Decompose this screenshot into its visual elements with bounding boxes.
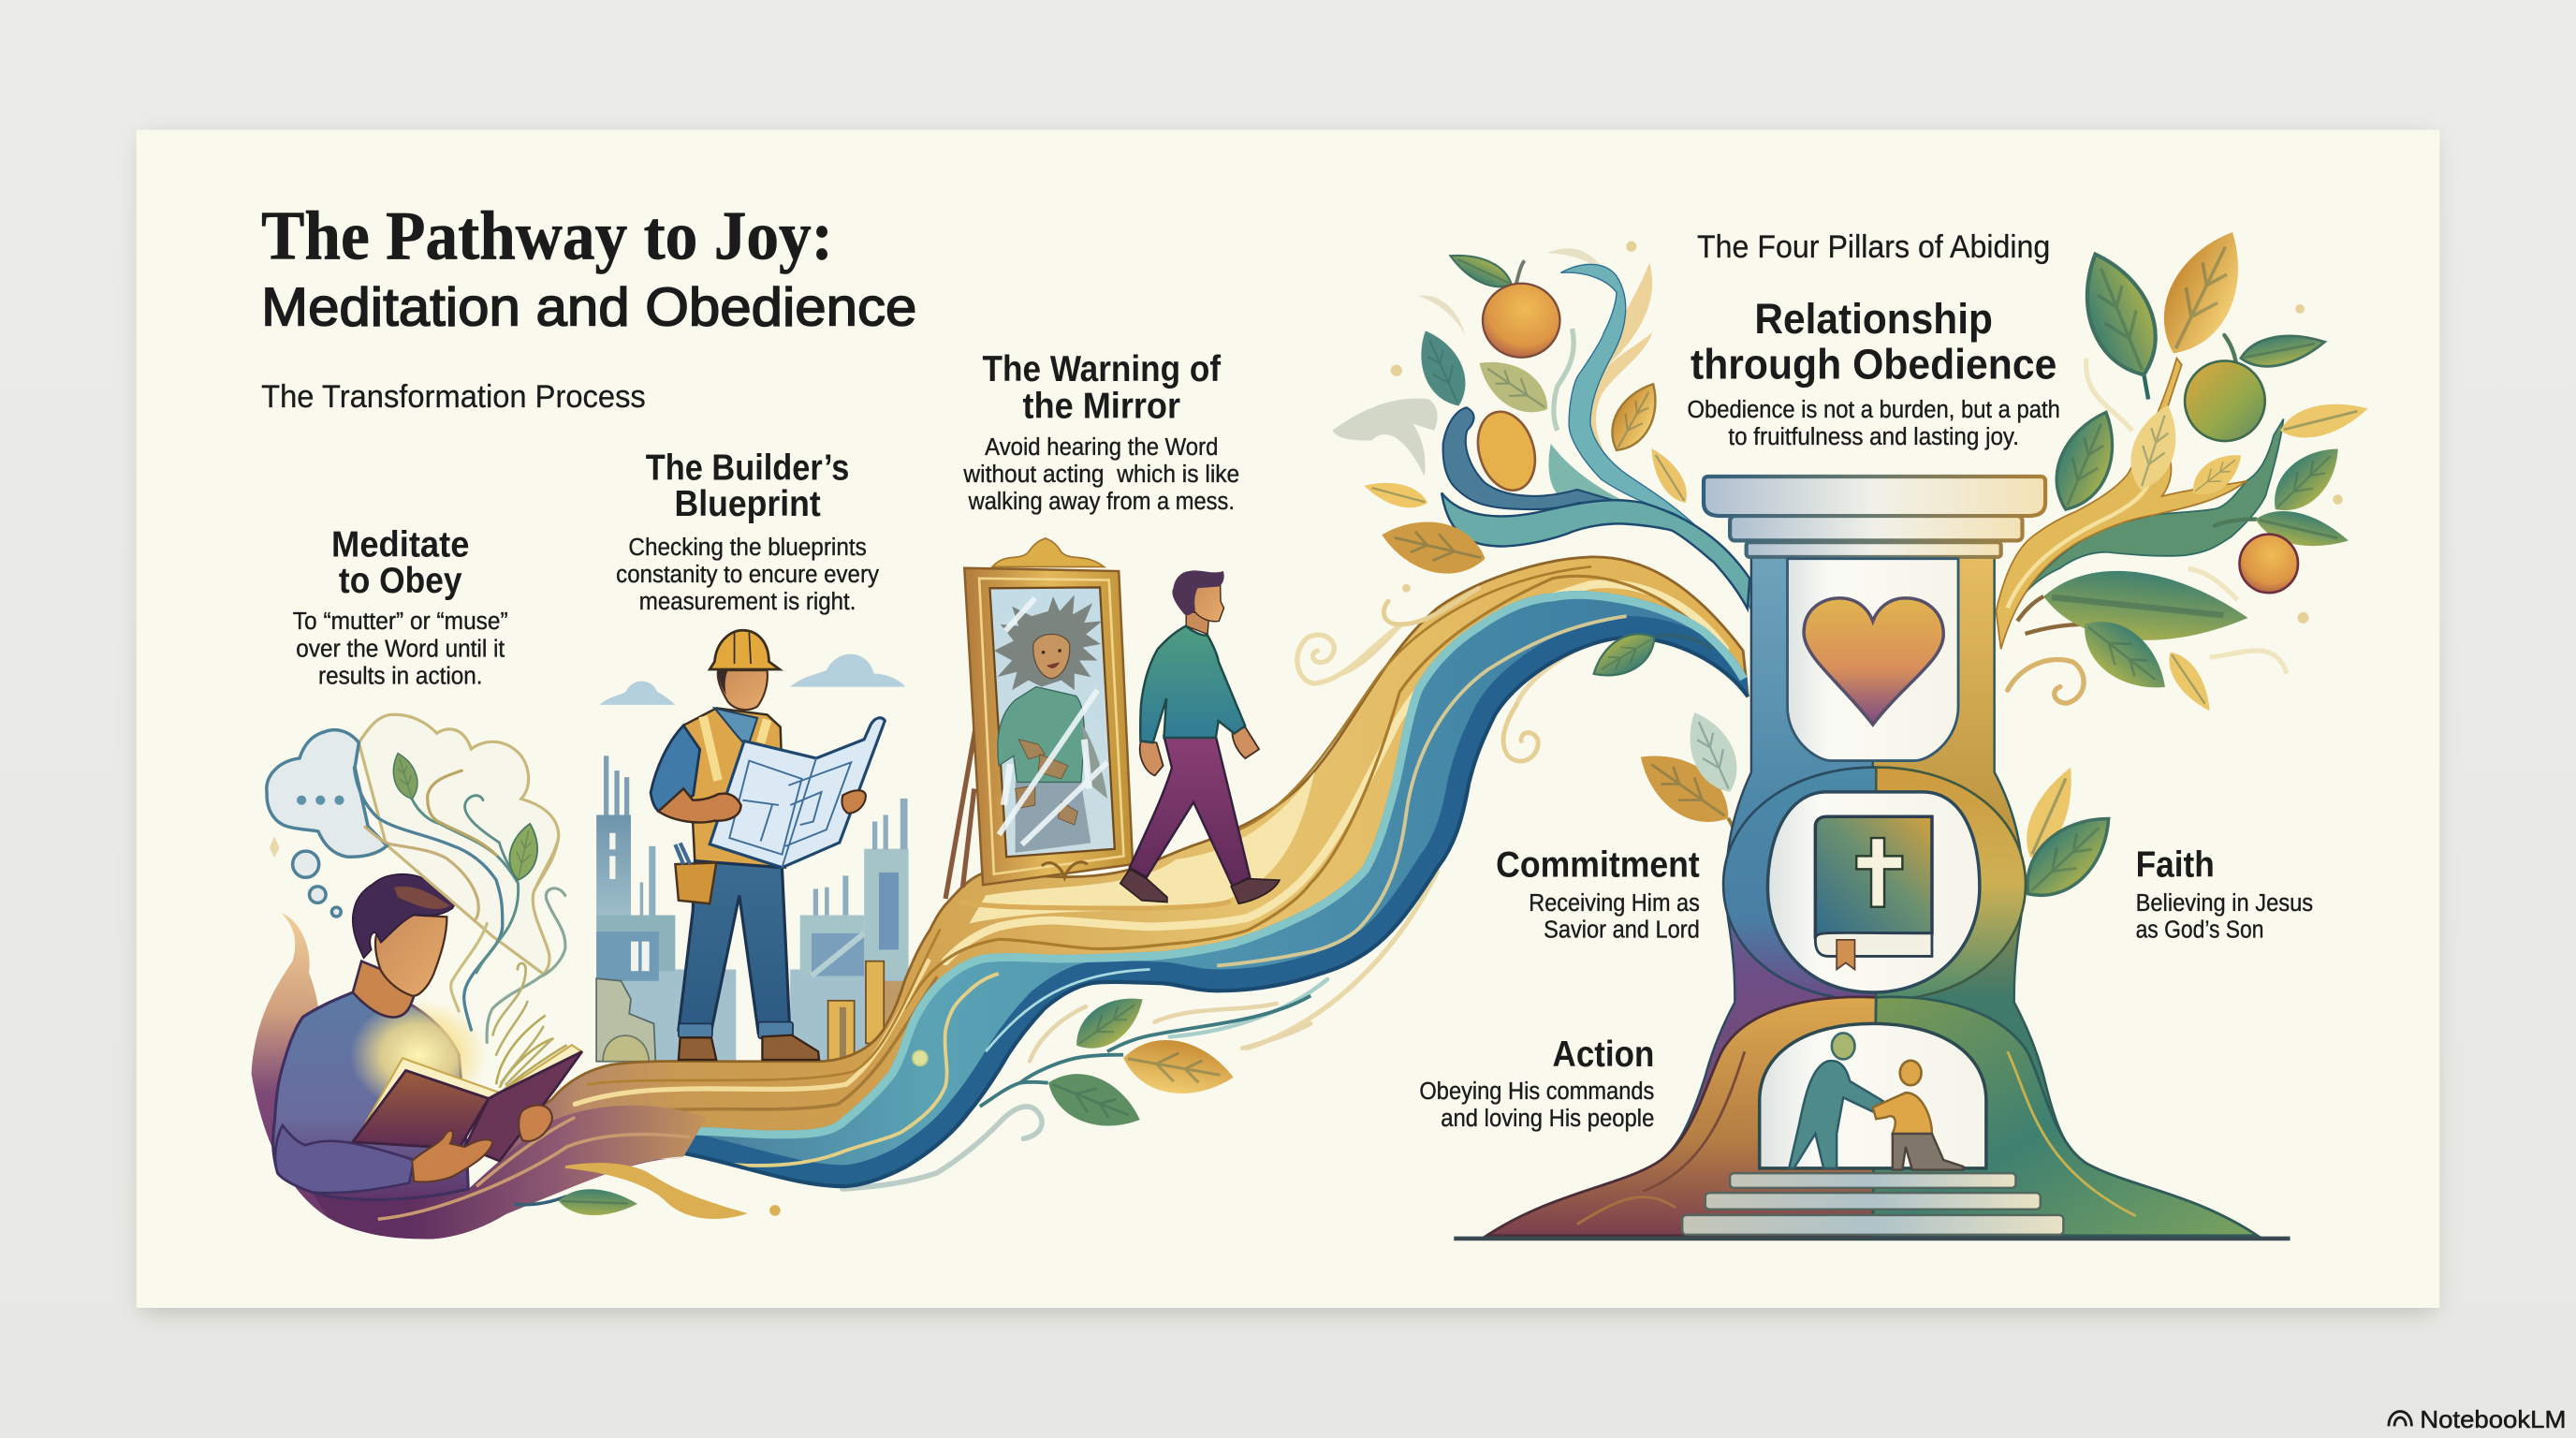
ribbon tail (313, 1106, 707, 1240)
right hand (519, 1105, 552, 1141)
ribbon gold stripes (567, 566, 1738, 1123)
pale wisp leaf (1332, 399, 1438, 477)
gold curls (1297, 626, 1399, 683)
title: The Pathway to Joy: (261, 197, 833, 273)
hair (353, 874, 457, 958)
trousers (1130, 736, 1250, 887)
text block: meditate to obey: To “mutter” or “muse” (293, 609, 508, 635)
text block: warning of the mirror: without acting which is like (962, 462, 1239, 488)
ribbon path (493, 557, 1748, 1191)
pale right wisps (2086, 359, 2287, 674)
stand (945, 721, 976, 899)
sweater (1140, 626, 1245, 742)
boots (679, 1037, 716, 1060)
text block: meditate to obey: to Obey (339, 561, 462, 601)
hair (1172, 570, 1224, 615)
wisps behind ribbon (842, 626, 1617, 1189)
teal upper stripe (696, 591, 1747, 1138)
glow (350, 999, 488, 1110)
shoes (1120, 869, 1167, 902)
vines below ribbon: leaves and curl (980, 588, 1538, 1141)
left teal branch (1560, 264, 1751, 611)
arm (275, 1125, 414, 1193)
green leaf lower (1040, 1062, 1149, 1141)
ribbon blue detail (575, 591, 1748, 1186)
capital blocks (1704, 477, 2045, 557)
cuffs (679, 1023, 712, 1037)
vest (683, 708, 785, 868)
builder figure (651, 630, 885, 1060)
ribbon dark edge (654, 638, 1748, 1186)
face (375, 914, 446, 996)
window one (1788, 559, 1958, 761)
shirt collar (714, 708, 757, 748)
reader figure (252, 874, 707, 1240)
blueprint (710, 718, 885, 868)
left hook branch (1443, 407, 1633, 509)
cloud dots (297, 796, 344, 805)
leaves on branches (1361, 218, 2372, 913)
gold cloud (359, 714, 559, 974)
right fruit stems (2215, 335, 2256, 526)
text block: relationship through obedience (1687, 295, 2060, 450)
text block: relationship through obedience: to fruitfulness and lasting joy. (1728, 424, 2019, 450)
walking man (1120, 570, 1280, 903)
tail stripes (378, 1117, 690, 1219)
sleeve (651, 726, 700, 812)
gold leaf (1119, 1033, 1237, 1103)
face (718, 670, 768, 710)
right curl (2008, 659, 2084, 703)
figure kneeling (1873, 1061, 1963, 1170)
flame swoosh (252, 913, 683, 1240)
lower arch left root (1486, 997, 1876, 1236)
pillar trunk right half (1873, 557, 2257, 1236)
text block: relationship through obedience: through Obedience (1690, 341, 2056, 389)
left hand (1140, 741, 1164, 775)
green leaf upper (1066, 984, 1153, 1061)
yellow thread (732, 972, 1000, 1167)
thought cloud with vines (267, 714, 565, 1084)
section heading: four pillars: The Four Pillars of Abiding (1697, 229, 2050, 265)
city skyline behind builder (596, 756, 909, 1062)
right branches (1996, 335, 2284, 703)
subtitle: Meditation and Obedience (261, 277, 916, 337)
base ornament (1042, 862, 1088, 877)
reflection right sleeve (1081, 723, 1107, 799)
book left cover (353, 1070, 489, 1149)
text block: builder's blueprint: Blueprint (674, 484, 821, 524)
text block: commitment: Savior and Lord (1544, 917, 1700, 943)
text block: action: Action (1553, 1034, 1654, 1075)
text block: meditate to obey: over the Word until it (296, 636, 505, 662)
jeans (679, 861, 790, 1033)
vine leaves (388, 750, 422, 802)
ground line (1454, 1237, 2291, 1240)
text block: warning of the mirror: The Warning of (983, 349, 1221, 389)
wisps (1030, 1004, 1310, 1061)
text block: faith: Believing in Jesus (2136, 890, 2313, 917)
text block: action: Obeying His commands (1419, 1078, 1654, 1105)
text block: commitment: Commitment (1496, 844, 1700, 885)
text block: warning of the mirror: the Mirror (1023, 387, 1180, 427)
ribbon highlight platform (970, 772, 1314, 923)
text block: builder's blueprint: Checking the blueprints (628, 535, 867, 561)
left branches (1332, 248, 1751, 611)
steps (1682, 1173, 2063, 1235)
text block: builder's blueprint: The Builder’s (646, 448, 849, 488)
text block: warning of the mirror: Avoid hearing the Word (985, 434, 1218, 461)
cross (1856, 838, 1902, 907)
text block: relationship through obedience: Obedience is not a burden, but a path (1687, 397, 2060, 423)
reflection body (998, 687, 1084, 782)
text block: commitment (1496, 844, 1700, 943)
dark lower stripe (654, 638, 1748, 1186)
forearm (658, 788, 741, 822)
dots (1391, 242, 2343, 624)
title block (261, 197, 916, 337)
text block: meditate to obey: Meditate (331, 524, 469, 565)
book right cover (465, 1051, 582, 1161)
face (1193, 577, 1224, 622)
text block: faith: Faith (2136, 844, 2215, 885)
icon: bible (1815, 816, 1932, 969)
glass cracks (999, 598, 1107, 844)
reflection face (1033, 634, 1070, 679)
figure standing (1789, 1033, 1882, 1168)
hair highlight (394, 887, 450, 909)
neck (1186, 611, 1209, 634)
text block: meditate to obey: results in action. (318, 664, 483, 690)
branch highlight (2008, 477, 2152, 608)
frame inner line (979, 579, 1123, 874)
right gold branch (1996, 359, 2247, 649)
small gold dot (769, 1205, 781, 1216)
panel: cream sheet (137, 130, 2439, 1308)
fruits (1469, 260, 2298, 593)
hair (718, 670, 728, 695)
reflection patches (1016, 740, 1077, 825)
clouds (600, 654, 905, 705)
gold wisps (1585, 263, 1653, 490)
reflection hair (994, 594, 1103, 690)
rising vines (354, 768, 565, 1084)
window three (1760, 1023, 1986, 1168)
ribbon blue band (575, 591, 1748, 1186)
ring right half (1876, 768, 2026, 1001)
text block: warning of the mirror: walking away from a mess. (968, 489, 1235, 515)
ribbon dot (913, 1050, 928, 1065)
text block: builder's blueprint (616, 448, 879, 615)
text block: warning of the mirror (962, 349, 1239, 515)
root lines (1577, 1051, 2136, 1224)
text block: builder's blueprint: measurement is right. (639, 589, 856, 615)
face marks (1044, 651, 1060, 653)
window two (1767, 792, 1980, 992)
text block: faith: as God’s Son (2136, 917, 2263, 943)
pale thread (986, 969, 1150, 1051)
ring left half (1723, 768, 1876, 1001)
pillar trunk left half (1486, 557, 1873, 1236)
text block: builder's blueprint: constanity to encure every (616, 562, 879, 588)
stems (1513, 260, 1525, 294)
fanned pages (496, 1016, 567, 1091)
teal wedge (1548, 444, 1643, 509)
text block: relationship through obedience: Relationship (1754, 295, 1993, 343)
pillar tower (1332, 218, 2372, 1240)
bottom leaves of reader swoosh (514, 1163, 781, 1219)
right lower green branch (1999, 419, 2284, 633)
thought bubbles (293, 851, 341, 917)
hard hat (710, 630, 780, 669)
text block: commitment: Receiving Him as (1529, 890, 1700, 917)
left lower band (1442, 493, 1749, 609)
left hand (412, 1131, 493, 1182)
text block: action: and loving His people (1441, 1106, 1654, 1132)
pale arc (1418, 248, 1618, 335)
section heading: transformation process: The Transformation Process (261, 379, 646, 415)
frame (964, 568, 1133, 885)
sparkles (270, 836, 279, 858)
right hand (842, 790, 866, 814)
icon: heart (1804, 598, 1943, 725)
mirror (945, 538, 1133, 899)
shirt (273, 992, 468, 1199)
text block: action (1419, 1034, 1654, 1132)
frame crown (992, 538, 1104, 566)
neck (353, 961, 414, 1018)
ribbon gold band (493, 557, 1748, 1191)
right hand (1232, 727, 1259, 758)
tool pouch (675, 862, 716, 903)
watermark: NotebookLM: NotebookLM (2420, 1407, 2566, 1433)
text block: faith (2136, 844, 2313, 943)
reflection skirt (1016, 782, 1090, 853)
blue cloud (267, 730, 387, 857)
pale thin stalk (1554, 329, 1573, 431)
text block: meditate to obey (293, 524, 508, 690)
open book pages (355, 1045, 581, 1142)
stems (980, 996, 1310, 1107)
panel shadow (141, 137, 2435, 1313)
glass (989, 587, 1115, 857)
lower arch right root (1873, 997, 2257, 1236)
